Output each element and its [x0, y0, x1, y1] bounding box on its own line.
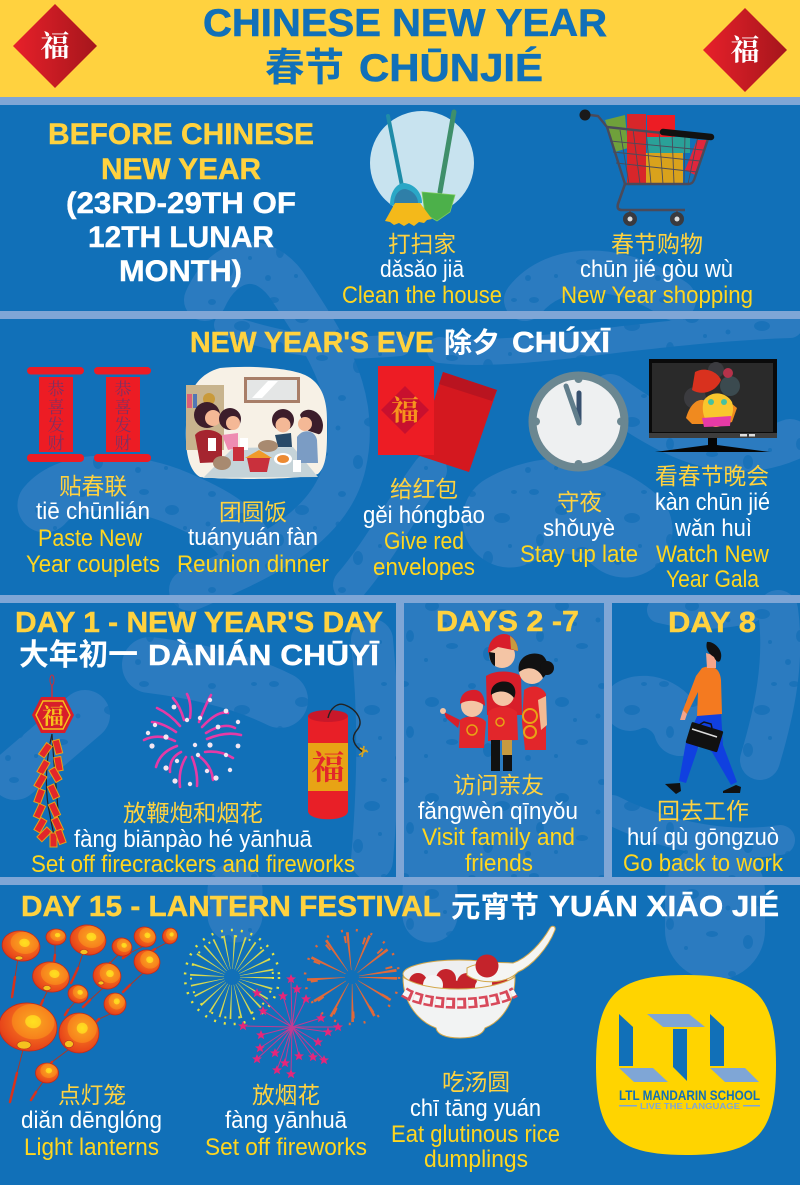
caption: light lanterns: [21, 1082, 162, 1161]
icon: couplets: 发: [114, 411, 132, 436]
icon: right fu diamond: [703, 8, 787, 92]
icon: reunion dinner scene: [186, 367, 327, 479]
title line 2: 春节: [265, 47, 344, 90]
icon: couplets: [27, 367, 151, 462]
caption: visit family and friends: friends: [465, 850, 533, 877]
icon: left fu diamond: [13, 4, 97, 88]
caption: light lanterns: Light lanterns: [24, 1134, 159, 1161]
icon: clock: [532, 375, 625, 468]
heading: before Chinese New Year: MONTH): [119, 255, 242, 288]
caption: New Year shopping: New Year shopping: [561, 282, 753, 309]
caption: visit family and friends: [418, 772, 578, 877]
caption: paste couplets: Paste New: [38, 525, 143, 552]
caption: stay up late: shǒuyè: [543, 515, 615, 542]
caption: set off firecrackers and fireworks: Set off firecrackers and fireworks: [31, 851, 355, 878]
title line 2: [265, 46, 543, 90]
caption: give red envelopes: gěi hóngbāo: [363, 502, 485, 529]
caption: stay up late: 守夜: [557, 489, 602, 515]
caption: paste couplets: 贴春联: [59, 473, 127, 499]
caption: give red envelopes: [363, 476, 485, 581]
heading: before Chinese New Year: (23RD-29TH OF: [66, 187, 296, 220]
caption: watch New Year Gala: wǎn huì: [674, 515, 752, 542]
icon: bowl of tangyuan: [403, 926, 555, 1038]
icon: large firecracker: [308, 704, 368, 819]
firework: orange: [305, 930, 399, 1024]
heading: before Chinese New Year: 12TH LUNAR: [88, 221, 274, 254]
icon: large firecracker: 福: [312, 742, 344, 789]
caption: visit family and friends: 访问亲友: [453, 772, 544, 798]
caption: watch New Year Gala: 看春节晚会: [655, 463, 769, 489]
caption: eat glutinous rice dumplings: [391, 1069, 560, 1173]
panel: New Year's Eve: [0, 319, 800, 595]
logo: LTL Mandarin School: LIVE THE LANGUAGE: [640, 1102, 741, 1111]
icon: couplets: 恭: [48, 375, 64, 400]
caption: set off firecrackers and fireworks: fàng biānpào hé yānhuā: [74, 826, 313, 853]
header banner: [0, 0, 800, 97]
heading: Day 1: 大年初一: [19, 639, 138, 672]
caption: watch New Year Gala: kàn chūn jié: [655, 489, 770, 516]
caption: eat glutinous rice dumplings: 吃汤圆: [442, 1069, 510, 1095]
caption: reunion dinner: tuányuán fàn: [188, 524, 318, 551]
heading: New Year's Eve: CHÚXĪ: [512, 325, 611, 359]
icon: couplets: 喜: [114, 393, 132, 418]
caption: go back to work: [623, 798, 784, 877]
caption: set off fireworks: fàng yānhuā: [225, 1107, 348, 1134]
icon: red envelopes: 福: [391, 389, 419, 429]
caption: reunion dinner: [177, 499, 329, 578]
caption: eat glutinous rice dumplings: Eat glutinous rice: [391, 1121, 560, 1148]
heading: Lantern Festival: DAY 15 - LANTERN FESTIVAL: [21, 891, 441, 923]
logo: LTL Mandarin School: [596, 975, 776, 1155]
caption: stay up late: Stay up late: [520, 541, 638, 568]
heading: Lantern Festival: [21, 889, 779, 924]
icon: magenta firework: [144, 694, 241, 787]
icon: man walking with briefcase: [665, 642, 741, 794]
heading: before Chinese New Year: [48, 118, 314, 288]
heading: Day 1: DAY 1 - NEW YEAR'S DAY: [15, 607, 383, 639]
heading: Lantern Festival: YUÁN XIĀO JIÉ: [549, 889, 779, 923]
caption: clean the house: 打扫家: [388, 231, 456, 257]
icon: couplets: 恭: [114, 375, 132, 400]
heading: before Chinese New Year: BEFORE CHINESE: [48, 118, 314, 151]
watermark: large speckled character: [15, 263, 790, 930]
caption: visit family and friends: fǎngwèn qīnyǒu: [418, 798, 578, 825]
caption: set off fireworks: 放烟花: [252, 1082, 320, 1108]
caption: light lanterns: diǎn dēnglóng: [21, 1107, 162, 1134]
caption: go back to work: Go back to work: [623, 850, 784, 877]
logo: LTL Mandarin School: LTL MANDARIN SCHOOL: [619, 1087, 760, 1103]
caption: paste couplets: [26, 473, 160, 578]
caption: clean the house: dǎsǎo jiā: [380, 256, 465, 283]
caption: set off fireworks: [205, 1082, 367, 1161]
heading: Day 1: DÀNIÁN CHŪYĪ: [148, 638, 380, 672]
heading: New Year's Eve: NEW YEAR'S EVE: [190, 327, 434, 359]
icon: broom and dustpan: [370, 111, 474, 226]
caption: clean the house: [342, 231, 502, 309]
caption: set off fireworks: Set off fireworks: [205, 1134, 367, 1161]
caption: go back to work: huí qù gōngzuò: [627, 824, 779, 851]
heading: Day 1: [15, 607, 383, 672]
panel: before Chinese New Year: [0, 105, 800, 311]
caption: set off firecrackers and fireworks: 放鞭炮和烟花: [123, 800, 263, 826]
icon: firecracker string: 福: [42, 700, 64, 731]
icon: television with lion dance: [649, 359, 777, 452]
caption: stay up late: [520, 489, 638, 568]
icon: left fu diamond: 福: [40, 24, 70, 65]
caption: New Year shopping: 春节购物: [611, 231, 703, 257]
heading: before Chinese New Year: NEW YEAR: [101, 153, 261, 186]
panel: Days 2-7: [404, 603, 604, 877]
panel: Day 1: [0, 603, 396, 878]
title line 2: CHŪNJIÉ: [359, 46, 543, 90]
caption: watch New Year Gala: [655, 463, 770, 593]
heading: New Year's Eve: 除夕: [444, 327, 500, 358]
caption: paste couplets: Year couplets: [26, 551, 160, 578]
icon: couplets: 喜: [48, 393, 64, 418]
caption: reunion dinner: Reunion dinner: [177, 551, 329, 578]
icon: couplets: 财: [48, 429, 64, 454]
heading: Lantern Festival: 元宵节: [451, 891, 539, 924]
icon: red lanterns: [0, 923, 179, 1102]
caption: watch New Year Gala: Watch New: [656, 541, 770, 568]
panel: Lantern Festival: [0, 885, 800, 1185]
icon: shopping cart: [580, 110, 711, 226]
icon: right fu diamond: 福: [730, 28, 760, 69]
heading: Days 2-7: DAYS 2 -7: [436, 606, 579, 638]
firework: magenta stars: [238, 974, 343, 1078]
caption: reunion dinner: 团圆饭: [219, 499, 287, 525]
caption: watch New Year Gala: Year Gala: [666, 566, 760, 593]
caption: set off firecrackers and fireworks: [31, 800, 355, 878]
caption: give red envelopes: 给红包: [390, 476, 458, 502]
caption: paste couplets: tiē chūnlián: [36, 498, 150, 525]
caption: give red envelopes: envelopes: [373, 554, 475, 581]
caption: clean the house: Clean the house: [342, 282, 502, 309]
icon: red envelopes: [378, 366, 497, 472]
caption: New Year shopping: chūn jié gòu wù: [580, 256, 733, 283]
heading: New Year's Eve: [190, 325, 611, 359]
title line 1: CHINESE NEW YEAR: [203, 2, 607, 45]
caption: go back to work: 回去工作: [657, 798, 749, 824]
caption: eat glutinous rice dumplings: dumplings: [424, 1146, 528, 1173]
firework: yellow: [185, 930, 279, 1024]
caption: give red envelopes: Give red: [384, 528, 464, 555]
caption: New Year shopping: [561, 231, 753, 309]
icon: couplets: 发: [48, 411, 64, 436]
heading: Day 8: DAY 8: [668, 607, 756, 639]
icon: family in red clothes: [440, 634, 554, 771]
dividers: [0, 97, 800, 885]
caption: visit family and friends: Visit family and: [422, 824, 575, 851]
icon: firecracker string: [32, 675, 74, 847]
icon: couplets: 财: [114, 429, 132, 454]
caption: eat glutinous rice dumplings: chī tāng yuán: [410, 1095, 541, 1122]
panel: Day 8: [612, 603, 800, 877]
caption: light lanterns: 点灯笼: [58, 1082, 126, 1108]
icon: fireworks: [185, 930, 399, 1078]
